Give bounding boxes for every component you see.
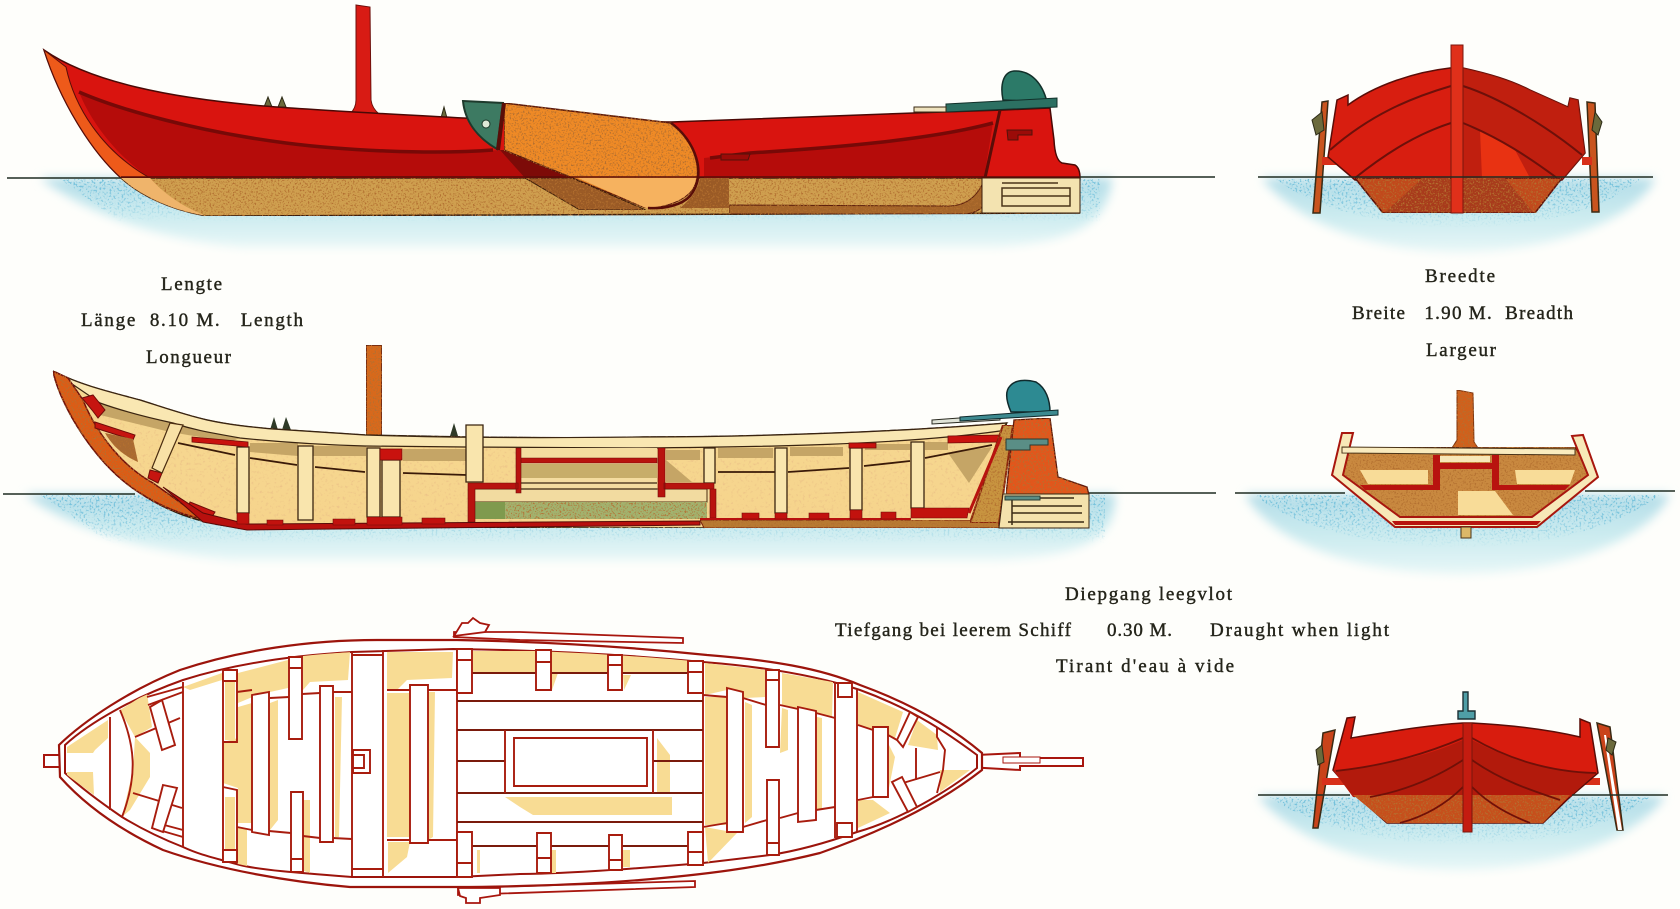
hull outline [59,640,982,887]
stippled keel right [700,520,999,528]
label: Longueur: Longueur [146,347,232,368]
waterline [1258,176,1653,178]
underwater hull [1355,178,1562,213]
bracket and iron [721,130,1032,160]
label block: breadth [1352,266,1574,361]
clamp line [178,443,992,475]
hull interior [1340,447,1592,522]
leeboard plate [463,101,503,149]
label: Breite 1.90 M. Breadth: Breite 1.90 M. Breadth [1352,303,1574,324]
oar top [454,618,683,643]
plan view from above [44,618,1083,903]
leeboard fittings [1312,112,1602,135]
leeboard submerged part [578,178,696,208]
top boat: exterior side view [7,5,1215,216]
label: Diepgang leegvlot: Diepgang leegvlot [1065,584,1233,605]
top end view: exterior [1258,45,1653,213]
water: lower end view [1258,796,1665,870]
label block: length [81,274,304,368]
stem [1451,45,1463,213]
leeboard arc slot [648,123,698,208]
leeboards [1313,101,1599,213]
label: Breedte: Breedte [1425,266,1495,287]
bow framing [82,395,215,517]
rudder head lower [1458,692,1475,719]
bow brace [152,423,183,473]
tiller [946,98,1057,112]
label: Länge 8.10 M. Length: Länge 8.10 M. Length [81,310,304,331]
cross beam lower [1322,778,1600,785]
cleats [264,97,447,118]
waterline [3,493,1216,494]
inner outline [65,649,977,877]
waterline lower [1258,794,1668,796]
hull above water [44,50,1080,178]
rudder right [933,753,1083,770]
water: top end view [1262,178,1655,252]
label: 0.30 M.: 0.30 M. [1107,620,1172,641]
leeboards lower [1313,723,1623,830]
plank lines lower [1336,738,1596,823]
bow band [44,50,150,178]
cross beam [1322,157,1592,165]
shaded right side [1463,68,1585,180]
stern line [969,437,1001,513]
stern section [1006,418,1089,495]
hull [1328,68,1585,180]
yellow patches [67,651,970,873]
hull lower [1333,717,1598,823]
deck band [53,371,1007,448]
label: Largeur: Largeur [1426,340,1497,361]
water: middle boat [25,494,1115,560]
leeboard [504,103,698,208]
bow stipple knee [105,433,138,462]
leeboard shadow [500,150,571,178]
cleats section [270,417,458,436]
water: middle end view [1245,494,1670,574]
middle end view: cross section [1235,390,1675,538]
water: top boat [40,178,1112,247]
underwater lower [1353,795,1570,823]
stern post [985,110,1000,178]
stern lining band [729,178,996,214]
stern fittings [1005,439,1048,500]
oar bottom [458,881,695,903]
red bars [192,435,1000,460]
tiller section [932,415,1000,424]
stem lower [1463,723,1472,832]
cream highlights [1360,470,1575,515]
hull interior [53,371,1007,528]
stern block section [999,494,1089,528]
mast section [366,345,382,448]
waterline [1235,491,1675,493]
hull shell [1332,433,1598,527]
underwater hull [121,178,1080,216]
label: Draught when light: Draught when light [1210,620,1390,641]
plank lines [1330,86,1582,178]
frames [237,425,924,520]
fittings lower [1316,738,1616,765]
shaded lower strakes [1333,740,1596,797]
rudder head section [1007,380,1050,412]
waterline [7,177,1215,178]
label block: draught [835,584,1390,677]
keel shoe [1461,527,1471,538]
mast [350,5,379,114]
label: Tiefgang bei leerem Schiff: Tiefgang bei leerem Schiff [835,620,1072,641]
bow band section [53,371,205,520]
mast section [1452,390,1478,448]
floors [237,508,969,525]
leeboard stippled shadow [525,178,646,210]
stern block [982,178,1080,213]
tan shading under deck [100,403,992,483]
keel [163,487,700,530]
well compartment [468,448,716,522]
structure lines [110,649,945,877]
darker lower strake [79,92,570,178]
rudder head [1002,71,1047,102]
thwarts [150,649,918,877]
stern knee [970,425,1013,523]
middle boat: longitudinal section [3,345,1216,530]
stem left [44,755,93,767]
carlings [1360,455,1570,490]
lower end view: exterior stern [1258,692,1668,832]
label: Lengte: Lengte [161,274,222,295]
bow underwater band [121,178,207,216]
deck [1342,447,1575,455]
label: Tirant d'eau à vide: Tirant d'eau à vide [1056,656,1234,677]
wale [79,92,993,158]
